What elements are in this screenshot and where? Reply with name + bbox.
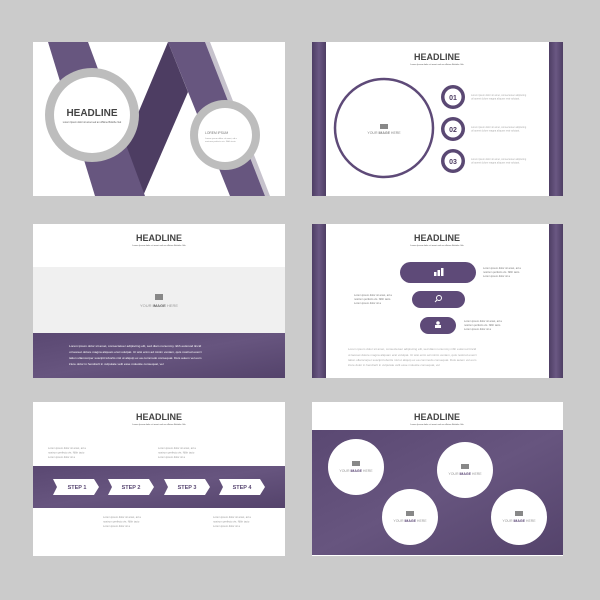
slide 2: numbered list: Lorem Ipsum dolor sit amet sed an offisine Bolothe Vek (410, 63, 465, 66)
pill: user (420, 317, 456, 334)
purple text band: ut laoreet dolore magna aliquam erat volutpat. Ut wisi enim ad minim veniam, quis nostrud exerci (69, 350, 202, 354)
slide 4: pills: iriure dolor in hendrerit in vulputate velit esse molestie consequat, vel (348, 363, 440, 367)
slide 6: four image circles: Lorem Ipsum dolor sit amet sed an offisine Bolothe Vek (410, 423, 465, 426)
ribbon: right (168, 42, 270, 196)
slide 4: pills: Lorem Ipsum dolor sit amet sed an offisine Bolothe Vek (410, 244, 465, 247)
lorem ipsum circle: Lorem ipsum dolor sit amet, ad a (205, 137, 238, 140)
items: ut laoreet dolore magna aliquam erat volutpat. (471, 162, 520, 164)
purple text band: tation ullamcorper suscipit lobortis nisl ut aliquip ex ea commodo consequat. Duis autem vel eum (69, 356, 202, 360)
slide 6: four image circles: YOUR IMAGE HERE (502, 519, 536, 523)
image circle: YOUR IMAGE HERE (367, 131, 401, 135)
slide 5: steps: Lorem ipsum dolor sit amet, ad a (158, 446, 196, 450)
slide 5: steps: HEADLINE (136, 412, 182, 422)
slide 4: pills: Lorem ipsum dolor sit a (464, 327, 492, 331)
slide 5: steps: Lorem Ipsum dolor sit amet sed an offisine Bolothe Vek (132, 423, 187, 426)
steps band (33, 466, 285, 508)
slide 4: pills: HEADLINE (414, 233, 460, 243)
headline circle: HEADLINE (66, 108, 118, 119)
slide 5: steps: Lorem ipsum dolor sit a (158, 455, 186, 459)
items: 01 (449, 95, 457, 102)
slide 2: numbered list: HEADLINE (414, 52, 460, 62)
slide 5: steps: nostrum perfecto vis. Nibh tacio (103, 520, 140, 524)
items: ut laoreet dolore magna aliquam erat volutpat. (471, 130, 520, 132)
ribbon: left (48, 42, 145, 196)
slide 6: four image circles: YOUR IMAGE HERE (339, 469, 373, 473)
slide 4: pills: nostrum perfecto vis. Nibh tacio (464, 323, 501, 327)
slide 4: pills: Lorem ipsum dolor sit amet, consectetuer adipiscing elit, sed diam nonummy nibh euismod tincid (348, 347, 477, 351)
slide 2: numbered list (312, 42, 563, 196)
slide 4: pills: Lorem ipsum dolor sit a (483, 274, 511, 278)
steps band: STEP 1 (68, 485, 86, 491)
items: 02 (449, 127, 457, 134)
slide 5: steps: Lorem ipsum dolor sit a (103, 524, 131, 528)
slide 4: pills: Lorem ipsum dolor sit a (354, 301, 382, 305)
slide 4: pills: Lorem ipsum dolor sit amet, ad a (464, 319, 502, 323)
slide 5: steps: Lorem ipsum dolor sit amet, ad a (213, 515, 251, 519)
slide 4: pills: nostrum perfecto vis. Nibh tacio (483, 270, 520, 274)
steps band: STEP 4 (233, 485, 252, 491)
image placeholder (33, 267, 285, 333)
purple text band: iriure dolor in hendrerit in vulputate velit esse molestie consequat, vel (69, 362, 164, 366)
headline circle (45, 68, 139, 162)
slide 3: image band: Lorem Ipsum dolor sit amet sed an offisine Bolothe Vek (132, 244, 187, 247)
steps band: STEP 3 (178, 485, 196, 491)
items: Lorem ipsum dolor sit amet, consectetuer adipiscing (471, 126, 527, 129)
items (441, 85, 527, 173)
slide 5: steps: nostrum perfecto vis. Nibh tacio (48, 450, 85, 454)
slide 4: pills: tation ullamcorper suscipit lobortis nisl ut aliquip ex ea commodo consequat. Duis autem vel eum (348, 358, 477, 362)
image circle (335, 79, 433, 177)
slide 6: four image circles: YOUR IMAGE HERE (393, 519, 427, 523)
lorem ipsum circle: nostrum perfecto vis. Nibh tacio (205, 140, 236, 143)
lorem ipsum circle (190, 100, 260, 170)
slide 6: four image circles: HEADLINE (414, 412, 460, 422)
slide 1: ribbon title (33, 42, 285, 196)
slide 4: pills: nostrum perfecto vis. Nibh tacio (354, 297, 391, 301)
headline circle: Lorem Ipsum dolor sit amet sed an offisine Bolothe Vek (63, 121, 122, 124)
slide 3: image band (33, 224, 285, 378)
slide 5: steps: Lorem ipsum dolor sit a (48, 455, 76, 459)
ribbon: middle dark (110, 42, 188, 196)
slide 5: steps: Lorem ipsum dolor sit amet, ad a (103, 515, 141, 519)
slide 5: steps: nostrum perfecto vis. Nibh tacio (158, 450, 195, 454)
steps band: STEP 2 (122, 485, 140, 491)
lorem ipsum circle: LOREM IPSUM (205, 131, 228, 135)
pill: search (412, 291, 465, 308)
items: ut laoreet dolore magna aliquam erat volutpat. (471, 98, 520, 100)
slide 6: four image circles (312, 402, 563, 556)
slide 4: pills: Lorem ipsum dolor sit amet, ad a (483, 266, 521, 270)
purple text band (33, 333, 285, 378)
items: Lorem ipsum dolor sit amet, consectetuer adipiscing (471, 94, 527, 97)
image placeholder: YOUR IMAGE HERE (140, 303, 178, 308)
slide 6: four image circles: YOUR IMAGE HERE (448, 472, 482, 476)
slide 4: pills: Lorem ipsum dolor sit amet, ad a (354, 293, 392, 297)
purple text band: Lorem ipsum dolor sit amet, consectetuer adipiscing elit, sed diam nonummy nibh euismod tincid (69, 344, 202, 348)
slide 4: pills (312, 224, 563, 378)
slide 5: steps: Lorem ipsum dolor sit amet, ad a (48, 446, 86, 450)
slide 5: steps: Lorem ipsum dolor sit a (213, 524, 241, 528)
pill: chart (400, 262, 476, 283)
slide 4: pills: ut laoreet dolore magna aliquam erat volutpat. Ut wisi enim ad minim veniam, quis nostrud exerci (348, 353, 477, 357)
slide 5: steps: nostrum perfecto vis. Nibh tacio (213, 520, 250, 524)
items: Lorem ipsum dolor sit amet, consectetuer adipiscing (471, 158, 527, 161)
slide 3: image band: HEADLINE (136, 233, 182, 243)
items: 03 (449, 159, 457, 166)
slide 5: steps (33, 402, 285, 556)
